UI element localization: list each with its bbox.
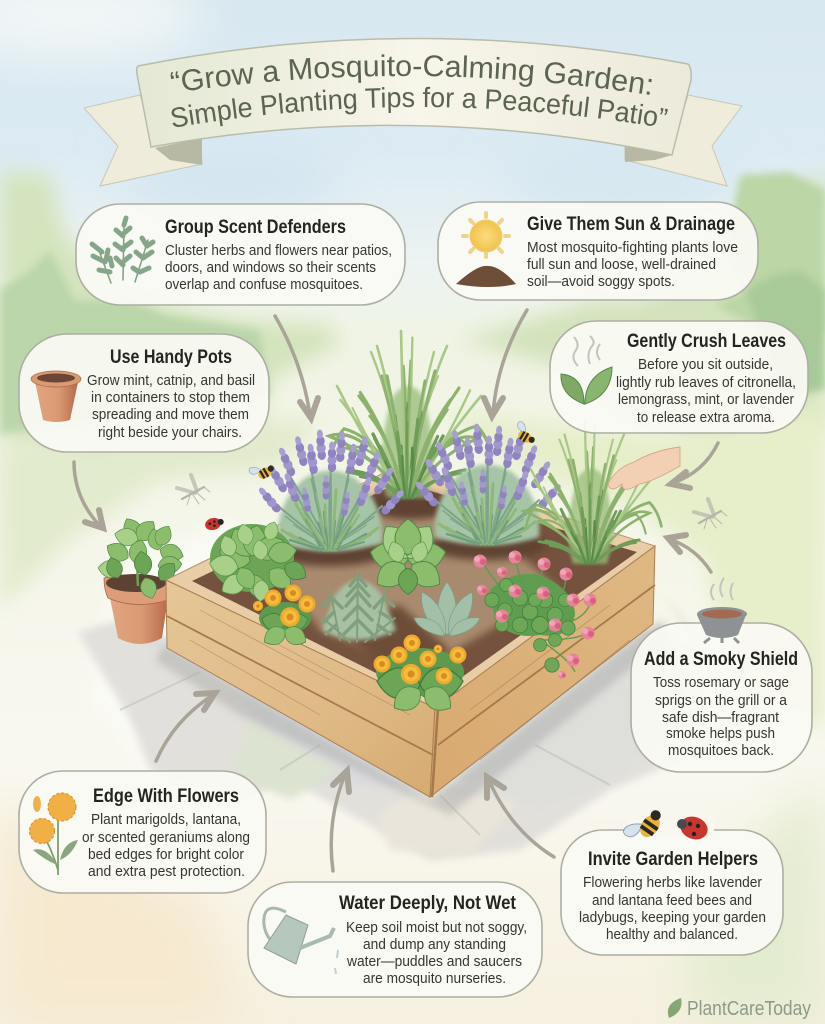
- text block: spreading and move them: [92, 407, 249, 423]
- heading: Give Them Sun & Drainage: [527, 214, 735, 235]
- text block: and dump any standing: [363, 937, 506, 953]
- icon: hand touching leaves: [608, 447, 680, 489]
- text block: and lantana feed bees and: [592, 893, 752, 909]
- panel: group scent defenders: [76, 204, 405, 305]
- text block: are mosquito nurseries.: [363, 971, 506, 987]
- plant: mint centre: [368, 519, 448, 594]
- icon: bee near right lavender: [511, 421, 540, 446]
- text block: full sun and loose, well-drained: [527, 257, 716, 273]
- heading: Gently Crush Leaves: [627, 331, 786, 352]
- potted plant: [97, 515, 185, 644]
- icon: sun and soil: [456, 213, 516, 287]
- text block: safe dish—fragrant: [662, 710, 779, 726]
- text block: Toss rosemary or sage: [653, 675, 789, 691]
- panel: gently crush leaves: [550, 321, 808, 433]
- bed left face: [166, 580, 435, 797]
- title text: “Grow a Mosquito-Calming Garden:: [170, 54, 652, 95]
- text block: Grow mint, catnip, and basil: [87, 373, 255, 389]
- panel: add a smoky shield: [631, 578, 812, 772]
- plant: lavender right: [413, 423, 563, 546]
- icon: grill with smoke: [697, 578, 747, 643]
- text block: lemongrass, mint, or lavender: [618, 392, 794, 408]
- plant: geraniums: [474, 550, 596, 679]
- icon: mosquito left: [177, 475, 210, 505]
- text block: [616, 357, 796, 426]
- text block: [527, 240, 738, 290]
- text block: water—puddles and saucers: [346, 954, 522, 970]
- arrow: crush leaves: [671, 443, 718, 488]
- text block: and extra pest protection.: [88, 864, 245, 880]
- text block: sprigs on the grill or a: [655, 693, 788, 709]
- icon: mosquito right: [694, 499, 727, 529]
- text block: right beside your chairs.: [98, 425, 242, 441]
- plant: lavender left: [256, 429, 406, 552]
- text block: Before you sit outside,: [638, 357, 773, 373]
- icon: leaves with scent: [561, 336, 612, 404]
- icon: bee and ladybug: [622, 801, 714, 848]
- plant: lemongrass right: [524, 422, 661, 564]
- panel: give them sun and drainage: [438, 202, 758, 300]
- text block: Most mosquito-fighting plants love: [527, 240, 738, 256]
- text block: healthy and balanced.: [606, 927, 738, 943]
- panel: edge with flowers: [19, 771, 266, 893]
- text block: Flowering herbs like lavender: [583, 875, 762, 891]
- text block: overlap and confuse mosquitoes.: [165, 277, 363, 293]
- arrow: handy pots: [74, 462, 103, 528]
- panel: invite garden helpers: [561, 801, 783, 955]
- text block: soil—avoid soggy spots.: [527, 274, 675, 290]
- bed right face: [430, 546, 655, 797]
- icon: ladybug on basil: [204, 515, 225, 532]
- heading: Edge With Flowers: [93, 786, 239, 807]
- text block: lightly rub leaves of citronella,: [616, 375, 796, 391]
- bed rim and soil: [166, 465, 655, 708]
- plant: rosemary: [322, 570, 396, 642]
- bed shadow: [155, 620, 672, 815]
- heading: Water Deeply, Not Wet: [339, 893, 517, 914]
- title banner ribbon: Simple Planting Tips for a Peaceful Patio”: [172, 86, 668, 127]
- text block: Keep soil moist but not soggy,: [346, 920, 527, 936]
- panel: water deeply: [248, 882, 542, 997]
- arrow: garden helpers: [487, 777, 554, 857]
- panel: use handy pots: [19, 334, 269, 452]
- raised wooden garden bed: [166, 465, 655, 797]
- heading: Invite Garden Helpers: [588, 849, 758, 870]
- plant: lemongrass centre: [329, 331, 491, 498]
- arrow: water deeply: [331, 771, 349, 871]
- plant: marigolds front: [374, 634, 466, 717]
- text block: ladybugs, keeping your garden: [579, 910, 766, 926]
- plant: sage: [414, 582, 480, 636]
- banner main band: [137, 38, 691, 155]
- text block: bed edges for bright color: [88, 847, 244, 863]
- text block: mosquitoes back.: [668, 743, 774, 759]
- text block: Plant marigolds, lantana,: [91, 812, 241, 828]
- text block: to release extra aroma.: [637, 410, 775, 426]
- text block: [82, 812, 250, 880]
- text block: in containers to stop them: [91, 390, 250, 406]
- plant: marigolds back: [253, 584, 316, 649]
- text block: Cluster herbs and flowers near patios,: [165, 243, 392, 259]
- text block: or scented geraniums along: [82, 830, 250, 846]
- patio paving stones: [78, 590, 705, 860]
- heading: Add a Smoky Shield: [644, 649, 798, 670]
- text block: [579, 875, 766, 943]
- arrow: group scent defenders: [275, 316, 318, 418]
- banner right tail: [625, 95, 742, 186]
- arrow: sun and drainage: [484, 310, 527, 416]
- arrow: smoky shield: [668, 535, 711, 572]
- text block: [165, 243, 392, 293]
- heading: Group Scent Defenders: [165, 217, 346, 238]
- text block: [87, 373, 255, 441]
- text block: doors, and windows so their scents: [165, 260, 376, 276]
- heading: Use Handy Pots: [110, 347, 232, 368]
- title banner ribbon: [83, 38, 743, 187]
- text block: smoke helps push: [666, 726, 775, 742]
- icon: marigold flowers: [30, 793, 78, 875]
- icon: herb sprigs: [92, 218, 153, 283]
- arrow: edge with flowers: [156, 693, 215, 761]
- icon: terracotta pot: [31, 371, 81, 422]
- icon: watering can: [264, 908, 338, 974]
- arrows pointing to the garden: [74, 310, 718, 871]
- icon: bee near left lavender: [248, 458, 276, 484]
- plant: basil: [208, 520, 310, 602]
- banner left tail: [84, 95, 202, 186]
- text block: [346, 920, 527, 987]
- text block: [653, 675, 789, 759]
